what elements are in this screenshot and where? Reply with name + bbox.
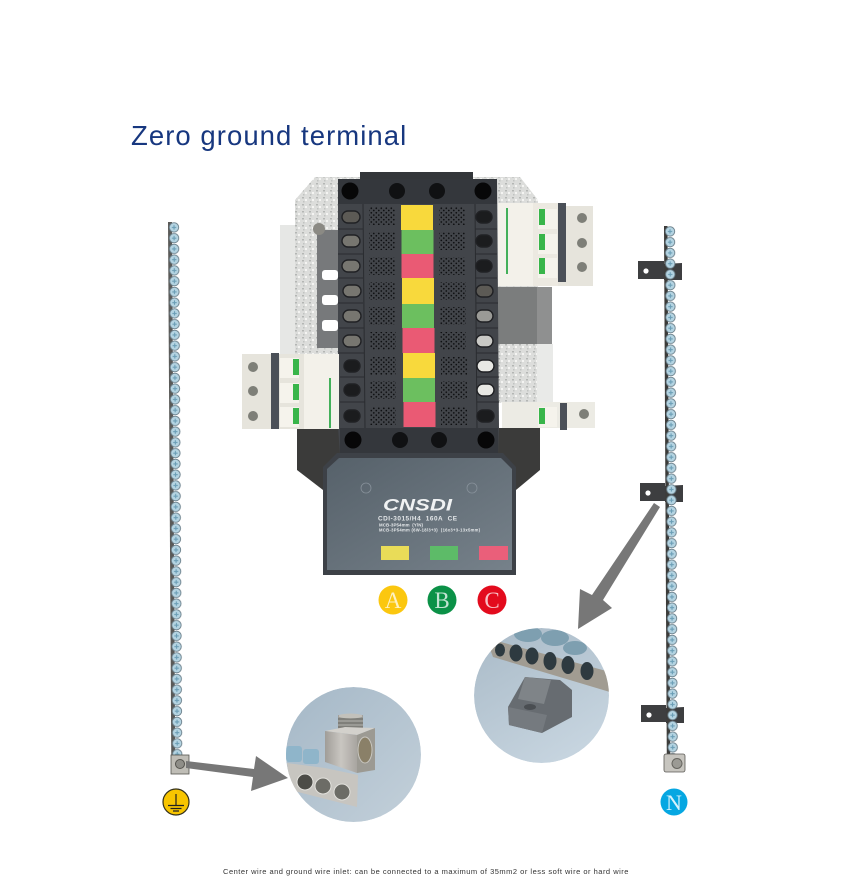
brand name: CNSDI: [383, 496, 453, 514]
section dividers: [338, 204, 499, 428]
photo: ground lug detail: [286, 687, 421, 822]
mesh vents left: [369, 207, 396, 425]
neutral bar: [638, 226, 685, 772]
lug upper block: [325, 727, 375, 773]
badge B: B: [434, 588, 450, 613]
mounting brackets: [638, 261, 684, 723]
phase colour strip: [401, 205, 436, 427]
lug screws: [286, 746, 319, 764]
breaker: bottom right: [502, 402, 595, 430]
bottom cap: [340, 428, 498, 454]
bar holes: [495, 644, 594, 680]
mesh vents right: [439, 207, 467, 425]
mounting plate: [280, 177, 553, 490]
icon: neutral badge: [660, 788, 688, 816]
top cap: [338, 172, 497, 204]
lug neck: [338, 714, 363, 728]
footer note: Center wire and ground wire inlet: can be connected to a maximum of 35mm2 or less soft wire or hard wire: [223, 867, 629, 876]
block body: [338, 180, 499, 454]
icon: neutral badge: N: [666, 790, 682, 815]
model text: MCB-3P54mm (6W-18/3+3) (16x3+3-13x5mm): [379, 528, 481, 532]
ground lug: [171, 755, 189, 774]
neutral lug: [664, 754, 685, 772]
icon: ground badge: [163, 789, 189, 815]
wire holes left: [342, 211, 361, 422]
breaker: bottom left: [242, 353, 339, 429]
arrow: bracket: [578, 503, 660, 629]
lug lower bar: [287, 763, 358, 807]
colour chips: [381, 546, 508, 560]
title: Zero ground terminal: [131, 120, 407, 151]
terminal bar: [490, 642, 609, 692]
breaker: top right: [498, 203, 593, 286]
bar screws: [514, 626, 587, 655]
phase badges: [378, 586, 506, 614]
badge C: C: [484, 588, 500, 613]
model text: CDI-3015/H4 160A CE: [378, 516, 458, 522]
wire holes right: [476, 211, 494, 422]
badge A: A: [385, 588, 402, 613]
arrow: ground lug: [186, 756, 288, 791]
label plate: [323, 453, 516, 575]
panel: distribution block: [242, 172, 595, 575]
photo: bracket detail: [474, 626, 610, 763]
bar holes: [297, 774, 350, 800]
ground bar: [167, 222, 189, 774]
grey bracket: [508, 677, 572, 733]
model text: [378, 516, 481, 532]
model text: MCB-3P54mm (Y/N): [379, 522, 424, 528]
